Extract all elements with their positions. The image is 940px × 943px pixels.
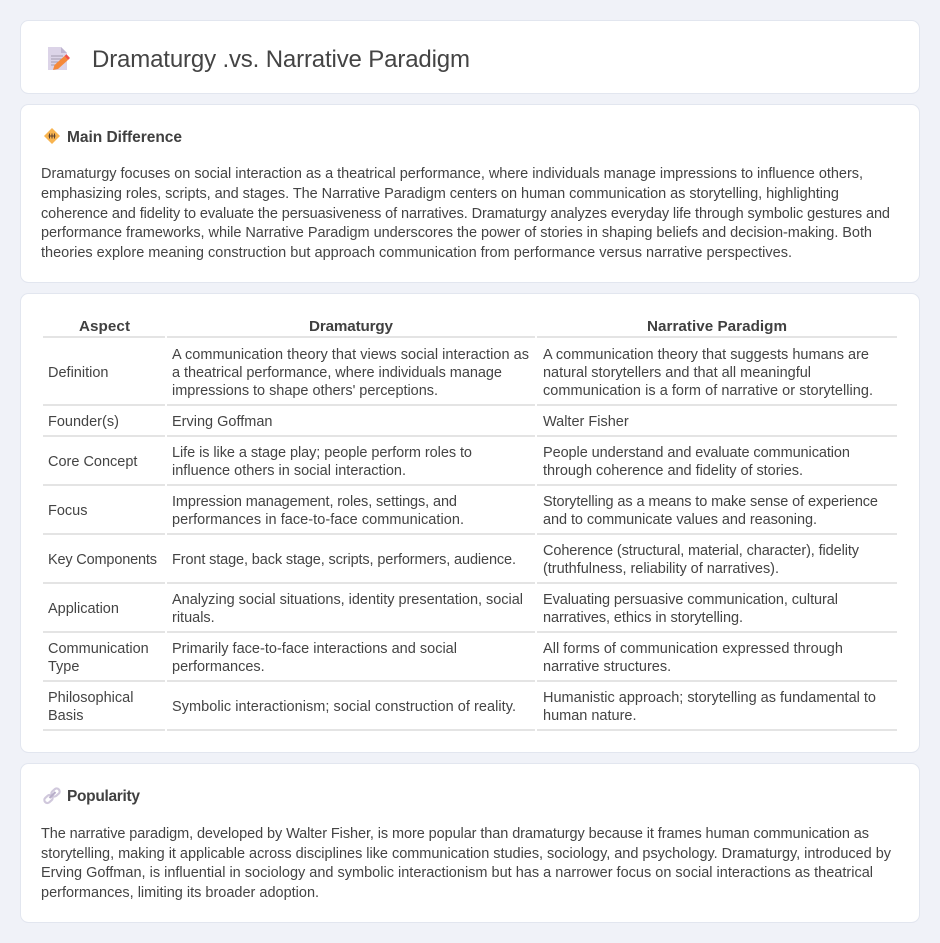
narrative key components — [543, 543, 860, 577]
dramaturgy definition: A communication theory that views social interaction as — [172, 347, 529, 363]
narrative application — [543, 592, 838, 626]
panel: main difference — [20, 104, 920, 282]
narrative philosophical basis — [543, 690, 876, 724]
narrative definition: natural storytellers and that all meaningful — [543, 365, 811, 381]
dramaturgy communication type: Primarily face-to-face interactions and social — [172, 641, 457, 657]
row label: communication type: Type — [48, 659, 79, 675]
dramaturgy focus — [172, 494, 464, 528]
narrative core concept: through coherence and fidelity of stories. — [543, 463, 803, 479]
dramaturgy focus: performances in face-to-face communication. — [172, 512, 464, 528]
narrative key components: (truthfulness, reliability of narratives). — [543, 561, 779, 577]
table header: narrative paradigm: Narrative Paradigm — [647, 318, 787, 335]
row label: philosophical basis — [48, 690, 133, 724]
narrative application: Evaluating persuasive communication, cultural — [543, 592, 838, 608]
narrative core concept: People understand and evaluate communication — [543, 445, 850, 461]
narrative philosophical basis: human nature. — [543, 708, 637, 724]
dramaturgy application: rituals. — [172, 610, 215, 626]
dramaturgy definition: a theatrical performance, where individuals manage — [172, 365, 502, 381]
narrative focus: Storytelling as a means to make sense of experience — [543, 494, 878, 510]
icon: link — [43, 787, 61, 804]
narrative communication type: All forms of communication expressed through — [543, 641, 843, 657]
narrative communication type: narrative structures. — [543, 659, 671, 675]
text: popularity body: storytelling, making it applicable across disciplines like communication studies, sociology, and psychology. Dramaturgy, introduced by — [41, 846, 892, 862]
narrative focus: and to communicate values and reasoning. — [543, 512, 817, 528]
heading: main difference: Main Difference — [67, 129, 182, 146]
row label: founders: Founder(s) — [48, 414, 119, 430]
text: popularity body: performances, limiting its broader adoption. — [41, 885, 319, 901]
dramaturgy definition — [172, 347, 529, 399]
text: main difference body: theories explore meaning construction but approach communication from performance versus narrative perspectives. — [41, 245, 792, 261]
row label: core concept: Core Concept — [48, 454, 137, 470]
text: main difference body: coherence and fidelity to evaluate the persuasiveness of narratives. Dramaturgy analyzes everyday life through symbolic gestures and — [41, 206, 890, 222]
row label: philosophical basis: Philosophical — [48, 690, 133, 706]
narrative definition — [543, 347, 873, 399]
icon: diamond sign — [44, 128, 60, 144]
dramaturgy key components: Front stage, back stage, scripts, performers, audience. — [172, 552, 516, 568]
dramaturgy core concept: Life is like a stage play; people perform roles to — [172, 445, 472, 461]
text: main difference body — [41, 166, 890, 261]
narrative application: narratives, ethics in storytelling. — [543, 610, 743, 626]
dramaturgy philosophical basis: Symbolic interactionism; social construction of reality. — [172, 699, 516, 715]
narrative definition: A communication theory that suggests humans are — [543, 347, 869, 363]
text: popularity body: The narrative paradigm, developed by Walter Fisher, is more popular than dramaturgy because it frames human communication as — [41, 826, 869, 842]
dramaturgy founder: Erving Goffman — [172, 414, 272, 430]
row label: philosophical basis: Basis — [48, 708, 83, 724]
table header: dramaturgy: Dramaturgy — [309, 318, 394, 335]
panel: popularity — [20, 764, 920, 922]
icon: memo with pencil — [48, 47, 70, 70]
dramaturgy communication type: performances. — [172, 659, 265, 675]
text: main difference body: emphasizing roles, scripts, and stages. The Narrative Paradigm centers on human communication as storytelling, highlighting — [41, 186, 839, 202]
panel: title card — [20, 20, 920, 94]
row label: application: Application — [48, 601, 119, 617]
dramaturgy core concept — [172, 445, 472, 479]
dramaturgy core concept: influence others in social interaction. — [172, 463, 406, 479]
narrative core concept — [543, 445, 850, 479]
row label: key components: Key Components — [48, 552, 157, 568]
text: popularity body — [41, 826, 892, 901]
narrative founder: Walter Fisher — [543, 414, 629, 430]
dramaturgy definition: impressions to shape others' perceptions. — [172, 383, 438, 399]
heading: popularity: Popularity — [67, 788, 140, 805]
narrative communication type — [543, 641, 843, 675]
dramaturgy application — [172, 592, 523, 626]
text: main difference body: performance frameworks, while Narrative Paradigm underscores the power of stories in shaping beliefs and decision-making. Both — [41, 225, 872, 241]
dramaturgy application: Analyzing social situations, identity presentation, social — [172, 592, 523, 608]
narrative definition: communication is a form of narrative or storytelling. — [543, 383, 873, 399]
table header: aspect: Aspect — [79, 318, 130, 335]
row label: communication type — [48, 641, 149, 675]
dramaturgy focus: Impression management, roles, settings, and — [172, 494, 457, 510]
panel: comparison table — [20, 294, 920, 752]
row label: communication type: Communication — [48, 641, 149, 657]
row label: definition: Definition — [48, 365, 108, 381]
narrative focus — [543, 494, 878, 528]
text: main difference body: Dramaturgy focuses on social interaction as a theatrical performance, where individuals manage impressions to influence others, — [41, 166, 863, 182]
narrative philosophical basis: Humanistic approach; storytelling as fundamental to — [543, 690, 876, 706]
row label: focus: Focus — [48, 503, 88, 519]
text: popularity body: Erving Goffman, is influential in sociology and symbolic interactionism but has a narrower focus on social interactions as theatrical — [41, 865, 873, 881]
title: Dramaturgy .vs. Narrative Paradigm — [92, 46, 470, 73]
dramaturgy communication type — [172, 641, 457, 675]
narrative key components: Coherence (structural, material, character), fidelity — [543, 543, 860, 559]
